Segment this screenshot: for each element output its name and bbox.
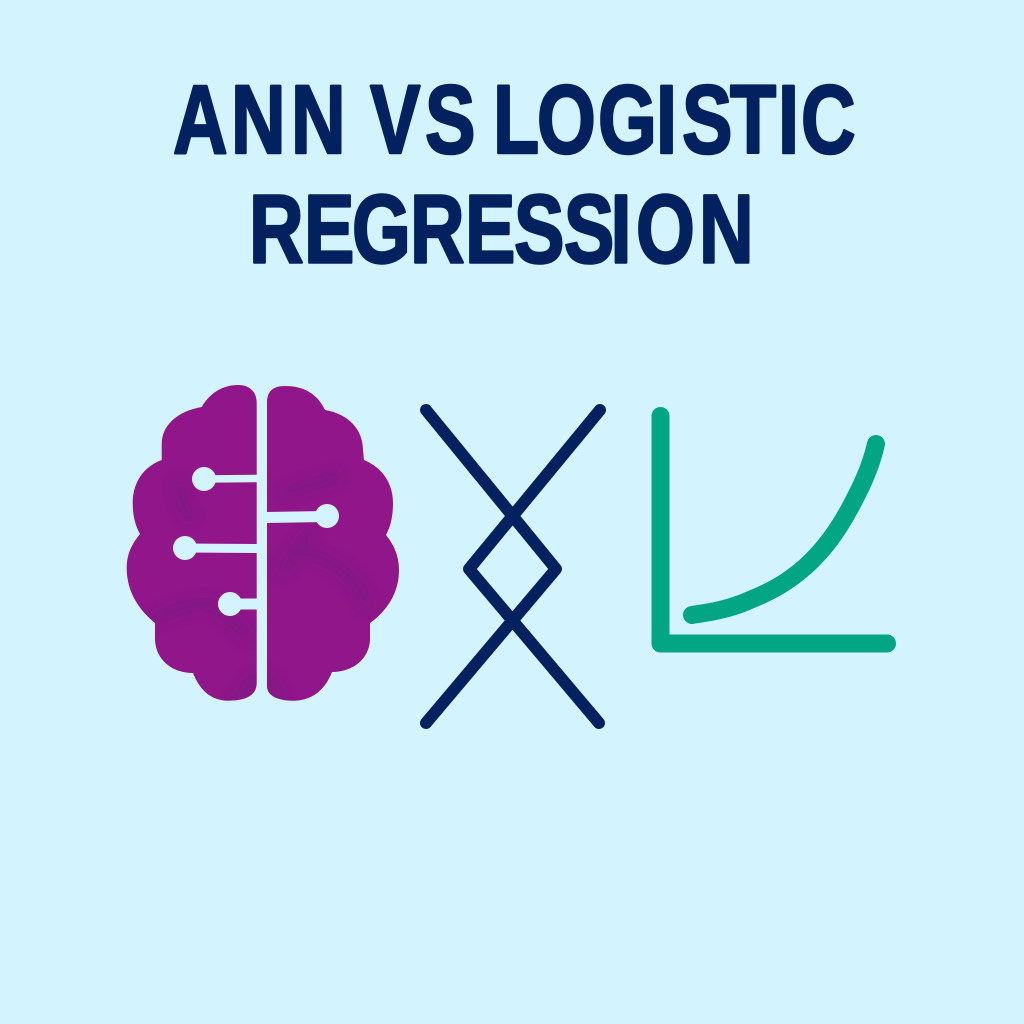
infographic canvas (126, 84, 896, 729)
title: REGRESSION (249, 176, 754, 284)
chart axes (660, 416, 887, 644)
brain circuit traces (185, 478, 327, 604)
brain circuit nodes (173, 467, 339, 616)
icon: logistic curve chart (660, 416, 887, 644)
title (173, 66, 856, 284)
title: ANN VS LOGISTIC (173, 66, 856, 174)
growth curve (692, 444, 876, 615)
icon: brain with circuit lines (126, 385, 399, 701)
icon: crossing lines network (426, 410, 600, 723)
